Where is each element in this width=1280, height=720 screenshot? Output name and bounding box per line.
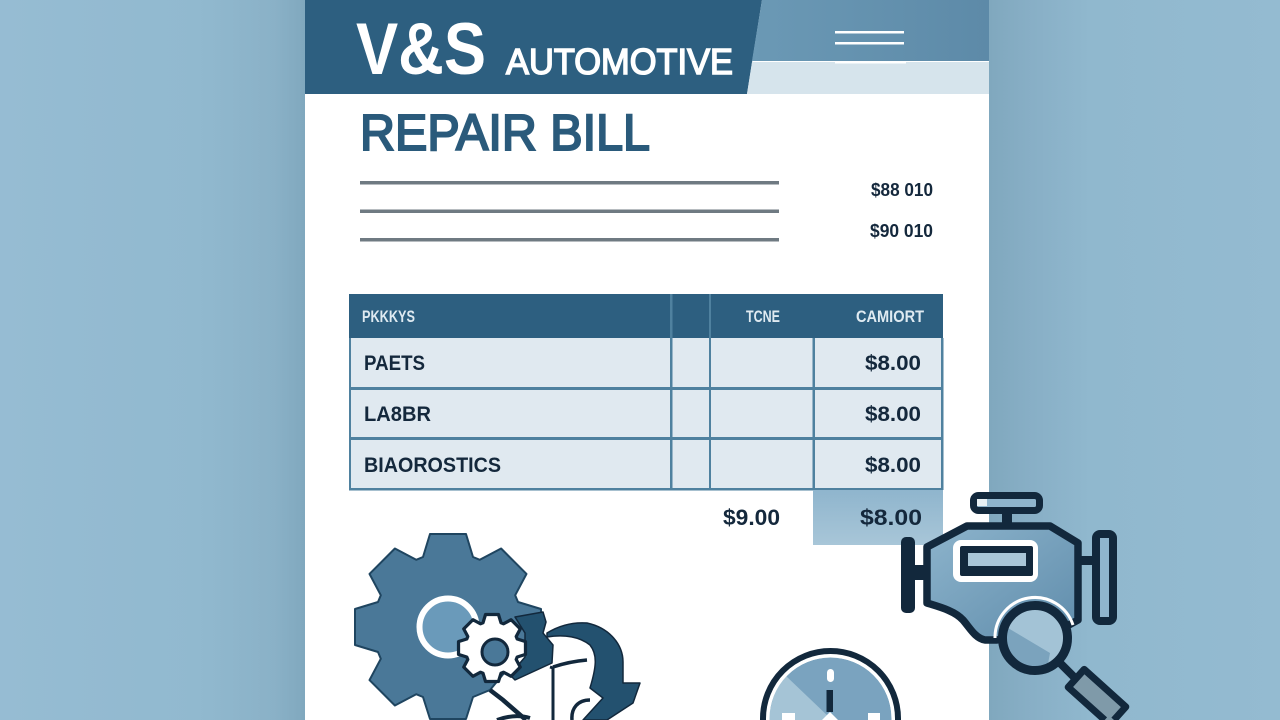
- summary amounts: [870, 180, 933, 241]
- title: REPAIR BILL: [360, 104, 650, 161]
- icon: menu lines: [835, 31, 906, 64]
- wrench jaw: [510, 612, 553, 680]
- header pale block: [747, 62, 989, 94]
- small gear hub: [482, 639, 508, 665]
- header dark banner: [305, 0, 762, 94]
- row label labor: LA8BR: [364, 403, 431, 426]
- magnifier grip outline: [1068, 669, 1126, 720]
- clock white ring: [768, 656, 894, 720]
- amount one: $88 010: [871, 180, 933, 200]
- engine body: [927, 526, 1078, 640]
- clock hand: [826, 690, 833, 712]
- panel: header band: [305, 0, 989, 94]
- magnifier: [990, 597, 1126, 720]
- engine right bar: [1096, 534, 1113, 621]
- engine cap highlight: [977, 499, 987, 506]
- brand name V&S: V&S: [356, 9, 486, 90]
- magnifier grip: [1068, 669, 1126, 720]
- brand word AUTOMOTIVE: AUTOMOTIVE: [506, 41, 733, 82]
- total highlight cell: [813, 490, 943, 545]
- engine cap stem: [1002, 513, 1012, 525]
- engine label plate: [953, 540, 1038, 582]
- background left: [0, 0, 305, 720]
- row label parts: PAETS: [364, 352, 425, 375]
- clock tick top: [827, 669, 834, 682]
- clock outer ring: [763, 651, 898, 720]
- icon: gears and wrench: [355, 534, 640, 720]
- clock tick left: [782, 713, 795, 720]
- row amount parts: $8.00: [865, 352, 921, 375]
- row amount diagnostics: $8.00: [865, 454, 921, 477]
- subtotal amount: $9.00: [723, 505, 780, 530]
- amount two: $90 010: [870, 221, 933, 241]
- summary lines: [360, 181, 779, 242]
- small gear: [459, 615, 525, 681]
- gear hub: [420, 598, 476, 656]
- total amount: $8.00: [860, 505, 922, 530]
- header label items: PKKKYS: [362, 307, 415, 326]
- magnifier lens: [1006, 609, 1064, 667]
- icon: engine with magnifier: [901, 496, 1126, 720]
- engine right connector: [1079, 556, 1093, 565]
- engine left bar: [901, 537, 915, 613]
- header label time: TCNE: [746, 307, 780, 326]
- magnifier white arc: [995, 597, 1073, 638]
- crescent wrench: [547, 623, 640, 720]
- total row: [723, 490, 943, 545]
- infographic canvas: [282, 0, 1130, 720]
- clock hub: [822, 712, 838, 720]
- row amount labor: $8.00: [865, 403, 921, 426]
- header label amount: CAMIORT: [856, 307, 925, 326]
- table body rows: [350, 338, 942, 489]
- magnifier handle shaft: [1060, 663, 1082, 685]
- table: [349, 294, 944, 490]
- clock light wedge: [770, 676, 830, 720]
- magnifier ring: [1002, 606, 1068, 670]
- icon: clock: [763, 651, 898, 720]
- table grid lines: [349, 294, 944, 490]
- engine top cap: [974, 496, 1040, 510]
- tool lines: [490, 660, 590, 720]
- row label diagnostics: BIAOROSTICS: [364, 454, 501, 477]
- panel: bill paper: [305, 0, 989, 720]
- header medium block: [752, 0, 989, 61]
- large gear: [355, 534, 541, 719]
- clock face: [770, 657, 892, 720]
- table header row: [349, 294, 943, 338]
- magnifier lens shade: [1007, 628, 1050, 666]
- engine left connector: [914, 565, 928, 580]
- clock tick right: [868, 713, 880, 720]
- background right: [989, 0, 1280, 720]
